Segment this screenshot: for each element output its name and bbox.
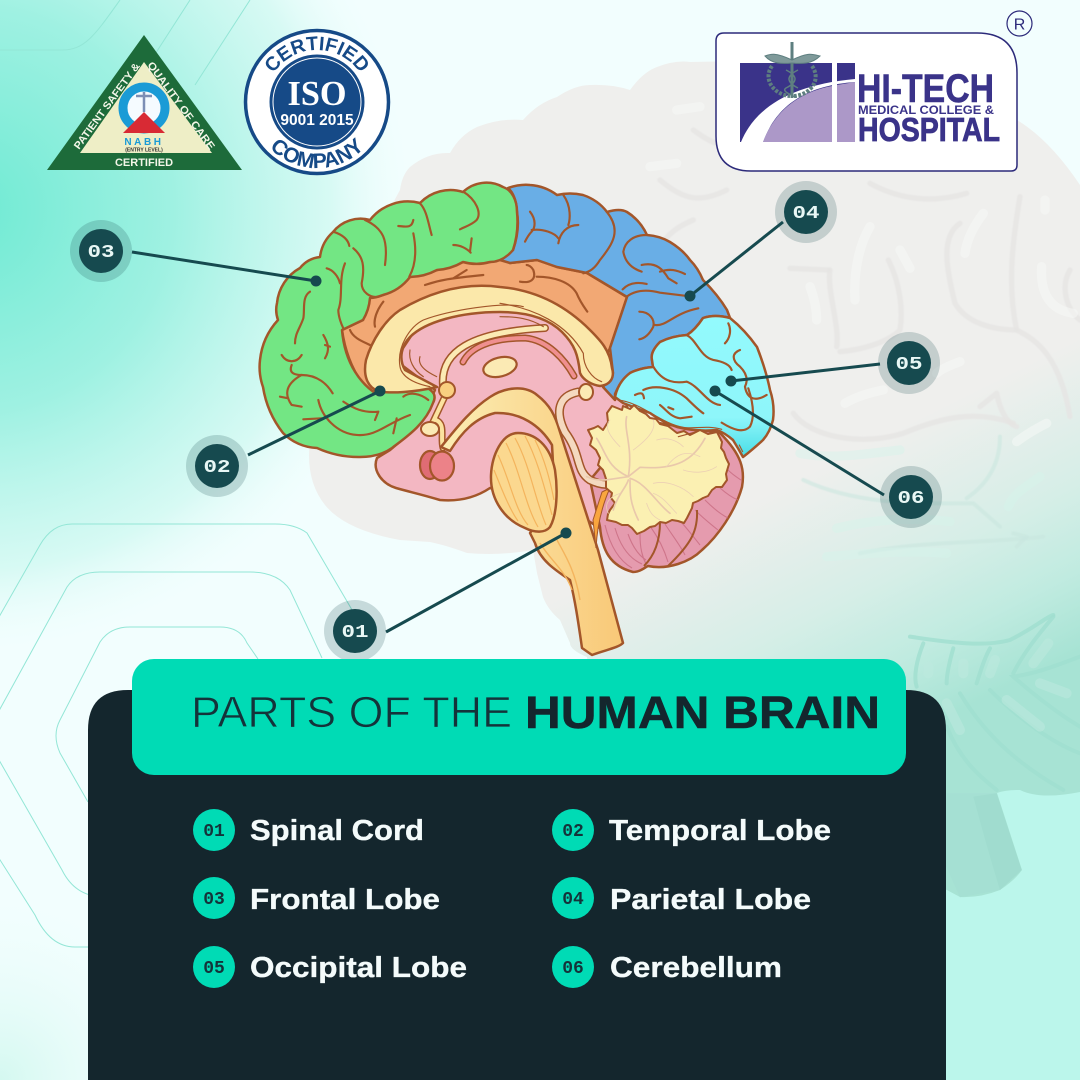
company arc text: COMPANY — [272, 137, 360, 168]
pineal gland — [579, 384, 593, 400]
entry level text: (ENTRY LEVEL) — [125, 148, 163, 154]
faded brain folds — [650, 87, 1080, 557]
cerebellum fold lines — [644, 510, 697, 566]
item 04: Parietal Lobe — [610, 884, 811, 916]
frontal and orange sulci — [280, 192, 523, 435]
right badge text: QUALITY OF CARE — [148, 62, 216, 150]
pointer 03 — [132, 252, 322, 286]
item 03: 03 — [203, 890, 225, 910]
cerebellum outer — [590, 420, 743, 572]
registered mark: R — [1014, 16, 1025, 34]
pointer 02 — [248, 386, 386, 455]
thalamus arc — [463, 338, 574, 376]
mammillary bodies — [420, 451, 454, 480]
ISO heading: ISO — [288, 74, 346, 113]
item 05: Occipital Lobe — [250, 952, 467, 984]
frontal and temporal green lobe — [260, 183, 518, 457]
registered mark — [1007, 11, 1032, 36]
pointer 04 — [684, 222, 783, 302]
parietal blue lobe — [500, 185, 730, 400]
item 02 — [552, 809, 831, 851]
logo card — [716, 33, 1017, 171]
logo hospital: HOSPITAL — [858, 111, 1000, 148]
item 06 — [552, 946, 782, 988]
item 06: Cerebellum — [610, 952, 782, 984]
title bold part: HUMAN BRAIN — [525, 687, 880, 738]
logo square mark — [740, 63, 855, 142]
corpus callosum — [365, 286, 613, 392]
pointer 06 — [710, 386, 884, 495]
item 01 — [193, 809, 424, 851]
pink inner brain region — [376, 300, 640, 528]
number badge 01 — [324, 600, 386, 662]
background large faded brain — [309, 60, 1080, 897]
spinal cord lines — [540, 540, 580, 600]
number badge 05: 05 — [896, 355, 922, 375]
item 02: 02 — [562, 822, 584, 842]
decorative hexagon line patterns — [0, 0, 355, 947]
item 01: Spinal Cord — [250, 815, 424, 847]
ISO certification seal — [244, 28, 390, 176]
orange wedge near cerebellum — [593, 488, 610, 548]
brainstem — [441, 388, 623, 655]
pons striations — [494, 436, 554, 527]
pons — [491, 433, 557, 532]
parietal and occipital sulci — [500, 195, 767, 452]
number badge 03 — [70, 220, 132, 282]
Q ring logo — [123, 87, 165, 133]
number badge 01: 01 — [342, 623, 369, 643]
cerebellum striations — [605, 470, 741, 568]
item 03 — [193, 877, 440, 919]
anatomical brain illustration — [260, 183, 774, 655]
NABH letters: NABH — [124, 137, 164, 148]
callout lines with pointer dots — [132, 222, 884, 632]
occipital cyan lobe — [615, 316, 774, 457]
peduncle stripe — [559, 392, 628, 484]
arbor vitae — [588, 405, 729, 534]
ISO number: 9001 2015 — [280, 112, 354, 129]
optic stalk and pituitary — [421, 382, 455, 448]
caduceus emblem — [765, 42, 820, 98]
number badge 05 — [878, 332, 940, 394]
number badge 04 — [775, 181, 837, 243]
orange cingulate region — [342, 250, 627, 395]
number badge 06 — [880, 466, 942, 528]
number badge 03: 03 — [88, 243, 114, 263]
fornix band — [443, 328, 545, 386]
left badge text: PATIENT SAFETY & — [74, 64, 140, 150]
pointer 01 — [386, 528, 572, 632]
thalamus oval — [481, 354, 519, 380]
seal outer ring — [246, 30, 388, 174]
item 04: 04 — [562, 890, 584, 910]
item 04 — [552, 877, 811, 919]
green triangle — [47, 35, 242, 170]
number badge 02 — [186, 435, 248, 497]
number badge 04: 04 — [792, 204, 820, 224]
NABH certification badge — [47, 35, 242, 170]
faded brain silhouette — [309, 60, 1080, 897]
certified arc text: CERTIFIED — [266, 36, 368, 70]
item 05 — [193, 946, 467, 988]
logo name: HI-TECH — [857, 67, 994, 111]
Hi-Tech logo — [716, 11, 1032, 171]
number badge 02: 02 — [204, 458, 230, 478]
title banner — [132, 659, 906, 775]
item 03: Frontal Lobe — [250, 884, 440, 916]
item 06: 06 — [562, 959, 584, 979]
arbor vitae branches — [587, 417, 717, 520]
item 05: 05 — [203, 959, 225, 979]
cream inner triangle — [80, 62, 212, 153]
pointer 05 — [726, 364, 880, 386]
number badge 06: 06 — [898, 489, 924, 509]
badge certified text: CERTIFIED — [115, 157, 173, 169]
legend list — [193, 809, 831, 988]
title light part: PARTS OF THE — [191, 688, 512, 737]
faded cerebellum ridges and stem — [910, 615, 1080, 897]
dark bottom panel — [88, 690, 946, 1080]
seal inner disc — [270, 54, 364, 150]
item 01: 01 — [203, 822, 225, 842]
item 02: Temporal Lobe — [609, 815, 831, 847]
logo subtitle: MEDICAL COLLEGE & — [858, 103, 994, 117]
